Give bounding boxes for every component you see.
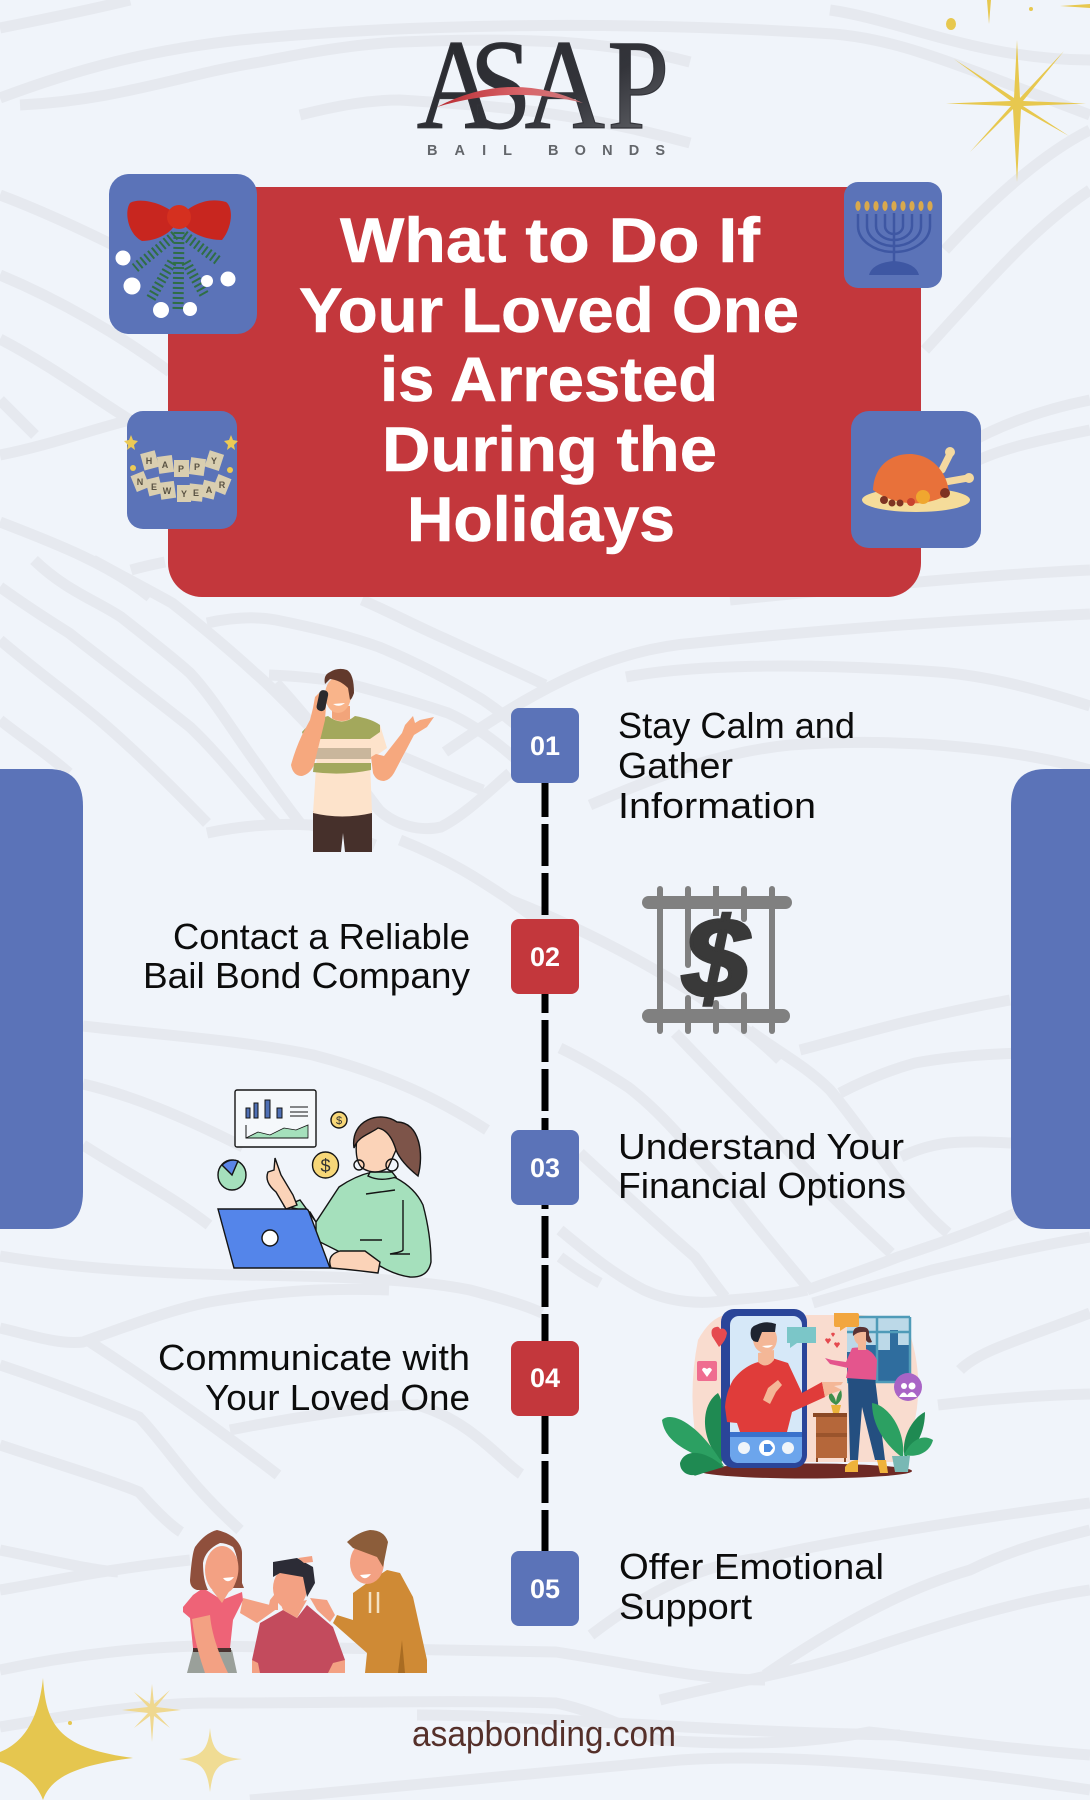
decorative gold star: top right	[946, 0, 1090, 182]
badge 04: 04	[530, 1363, 560, 1393]
side tab: left	[0, 769, 83, 1229]
step 02	[143, 886, 792, 1034]
small four-point star	[179, 1728, 242, 1792]
title line 1: What to Do If	[340, 206, 761, 276]
logo tagline: BONDS	[548, 143, 665, 159]
title line 2: Your Loved One	[299, 276, 799, 346]
side tab: right	[1011, 769, 1090, 1229]
chart card	[235, 1090, 316, 1147]
logo wordmark: ASAP	[417, 14, 669, 156]
step 03 text: Understand Your	[618, 1126, 904, 1167]
step 05 text	[619, 1546, 884, 1627]
man in hoodie	[310, 1530, 427, 1673]
man on screen	[725, 1322, 843, 1432]
thin star	[122, 1684, 181, 1742]
title line 4: During the	[382, 415, 717, 485]
icon: happy new year banner: H	[146, 456, 152, 466]
icon: mistletoe	[109, 174, 257, 334]
cabinet	[813, 1390, 847, 1462]
step 01	[291, 669, 855, 852]
icon: happy new year banner	[124, 411, 238, 529]
large star	[0, 1678, 133, 1800]
seated man	[252, 1556, 345, 1673]
step 04 text: Communicate with	[158, 1337, 470, 1378]
badge 03	[511, 1130, 579, 1205]
step 04 text: Your Loved One	[205, 1377, 470, 1418]
badge 03: 03	[530, 1153, 560, 1183]
woman	[825, 1327, 888, 1473]
window	[847, 1317, 910, 1382]
illustration: woman with laptop and finance charts: $	[336, 1115, 342, 1127]
decorative gold stars: bottom left	[0, 1678, 242, 1800]
icon: dollar behind bars	[642, 886, 792, 1034]
step 01 text: Gather	[618, 745, 733, 786]
logo swoosh	[437, 87, 583, 107]
step 04	[158, 1309, 933, 1478]
badge 01	[511, 708, 579, 783]
step 04 text	[158, 1337, 470, 1418]
illustration: man on the phone	[291, 669, 434, 852]
badge 05: 05	[530, 1574, 560, 1604]
step 02 text: Contact a Reliable	[173, 916, 470, 957]
step 01 text: Stay Calm and	[618, 705, 855, 746]
icon: happy new year banner: Y	[181, 489, 187, 499]
step 05 text: Support	[619, 1586, 752, 1627]
plant left	[662, 1393, 725, 1476]
icon: happy new year banner: W	[163, 486, 172, 496]
icon: happy new year banner: Y	[211, 456, 217, 466]
icon: dollar behind bars: $	[682, 896, 751, 1021]
icon: happy new year banner: E	[151, 482, 157, 492]
step 03	[218, 1090, 906, 1277]
illustration: video call between a couple	[662, 1309, 933, 1478]
title line 5: Holidays	[407, 485, 675, 555]
badge 04	[511, 1341, 579, 1416]
title panel	[168, 187, 921, 597]
illustration: friends offering support	[183, 1530, 427, 1673]
logo: ASAP Bail Bonds	[417, 14, 669, 159]
step 03 text	[618, 1126, 906, 1206]
icon: menorah	[844, 182, 942, 288]
red background	[168, 187, 921, 597]
badge 01: 01	[530, 731, 560, 761]
plant right	[872, 1403, 933, 1472]
icon: happy new year banner: A	[162, 460, 169, 470]
logo tagline	[427, 143, 665, 159]
badge 05	[511, 1551, 579, 1626]
badge 02	[511, 919, 579, 994]
chat icons	[697, 1313, 922, 1401]
illustration: woman with laptop and finance charts: $	[320, 1156, 331, 1176]
step 05 text: Offer Emotional	[619, 1546, 884, 1587]
step 01 text	[618, 705, 855, 826]
badge 02: 02	[530, 942, 560, 972]
step 03 text: Financial Options	[618, 1165, 906, 1206]
woman	[183, 1530, 278, 1673]
phone	[721, 1309, 807, 1468]
icon: happy new year banner: E	[193, 488, 199, 498]
icon: happy new year banner: P	[178, 464, 184, 474]
icon: happy new year banner: A	[206, 485, 213, 495]
illustration: woman with laptop and finance charts	[218, 1090, 431, 1277]
step 02 text: Bail Bond Company	[143, 955, 471, 996]
step 05	[183, 1530, 884, 1673]
title line 3: is Arrested	[380, 345, 718, 415]
step 01 text: Information	[618, 785, 816, 826]
timeline dashed line	[542, 775, 548, 1552]
icon: roast turkey	[851, 411, 981, 548]
website url: asapbonding.com	[412, 1713, 676, 1754]
icon: happy new year banner: R	[219, 480, 226, 490]
logo tagline: BAIL	[427, 143, 512, 159]
icon: happy new year banner: N	[137, 477, 143, 487]
icon: happy new year banner: P	[194, 462, 200, 472]
step 02 text	[143, 916, 471, 996]
